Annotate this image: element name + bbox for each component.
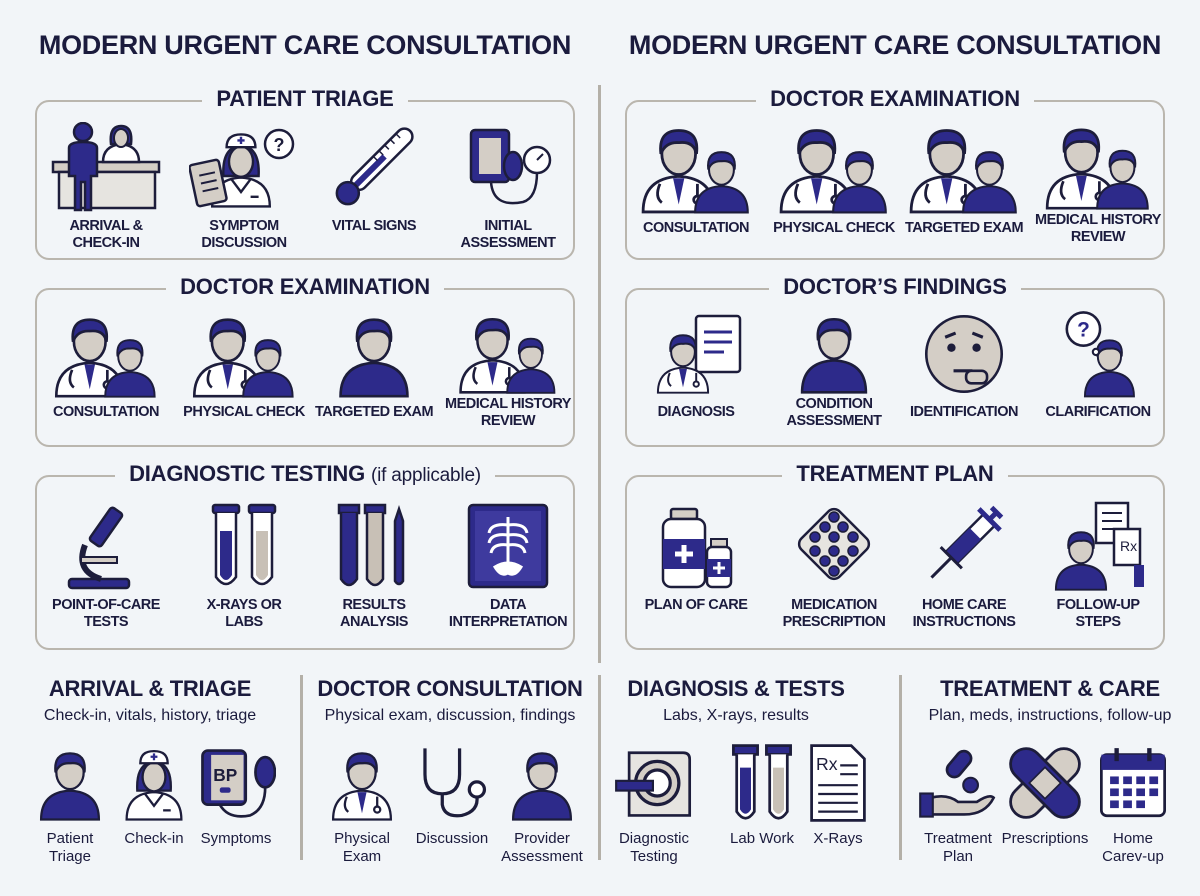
icon: symptoms [201, 749, 276, 847]
heading: patient triage: PATIENT TRIAGE [216, 86, 394, 111]
item: home care instructions [913, 506, 1016, 630]
heading: diagnosis & tests [586, 676, 886, 725]
heading: doctor consultation [317, 676, 583, 724]
icon: discussion: Discussion [416, 830, 488, 847]
heading: diagnosis & tests: DIAGNOSIS & TESTS [627, 676, 845, 701]
icon: home care / follow-up: Carev-up [1102, 848, 1164, 865]
item: data interpretation [449, 504, 567, 630]
icon: check-in: Check-in [124, 830, 184, 847]
icon: diagnostic testing [606, 742, 702, 866]
item: x-rays or labs: X-RAYS OR [207, 597, 281, 613]
item: medical history review: REVIEW [481, 413, 535, 429]
icon: home care / follow-up [1085, 742, 1181, 866]
icon: patient triage [40, 752, 100, 865]
item: arrival & check-in: ARRIVAL & [69, 218, 143, 234]
icon: x-rays: X-Rays [813, 830, 863, 847]
icon: treatment plan: Plan [943, 848, 973, 865]
item: data interpretation: DATA [490, 597, 526, 613]
panel: doctor examination (right) [625, 100, 1165, 260]
item: medical history review [1035, 128, 1162, 245]
heading: treatment plan: TREATMENT PLAN [796, 461, 994, 486]
heading: diagnostic testing: DIAGNOSTIC TESTING (if applicable) [129, 461, 481, 486]
heading: doctor consultation: Physical exam, discussion, findings [325, 707, 575, 724]
item: medical history review: MEDICAL HISTORY [1035, 212, 1161, 228]
item: consultation: CONSULTATION [643, 220, 749, 236]
icon: diagnostic testing: Diagnostic [619, 830, 689, 847]
item: initial assessment: INITIAL [484, 218, 532, 234]
icon: x-rays: Rx [816, 754, 838, 774]
item: arrival & check-in: CHECK-IN [73, 235, 139, 251]
heading: doctor examination: DOCTOR EXAMINATION [180, 274, 430, 299]
heading: doctor's findings: DOCTOR’S FINDINGS [783, 274, 1007, 299]
heading: diagnosis & tests: Labs, X-rays, results [663, 707, 809, 724]
item: x-rays or labs [206, 504, 282, 630]
icon: check-in [124, 750, 184, 847]
item: symptom discussion [189, 128, 294, 251]
section: arrival & triage [40, 676, 276, 865]
item: home care instructions: INSTRUCTIONS [913, 614, 1015, 630]
item: results analysis: RESULTS [342, 597, 406, 613]
icon: provider assessment: Provider [514, 830, 570, 847]
item: clarification [1045, 311, 1151, 420]
panel: doctor's findings [625, 288, 1165, 447]
panel: treatment plan [625, 475, 1165, 650]
item: targeted exam: TARGETED EXAM [315, 404, 433, 420]
heading: treatment & care [900, 676, 1200, 725]
item: home care instructions: HOME CARE [922, 597, 1006, 613]
item: results analysis [338, 504, 408, 630]
item: follow-up steps: STEPS [1075, 614, 1121, 630]
icon: physical exam: Physical [334, 830, 390, 847]
title: left: MODERN URGENT CARE CONSULTATION [39, 30, 571, 60]
item: point-of-care tests: TESTS [84, 614, 128, 630]
icon: provider assessment: Assessment [501, 848, 583, 865]
item: initial assessment [460, 128, 556, 251]
item: initial assessment: ASSESSMENT [461, 235, 555, 251]
item: targeted exam [315, 318, 433, 420]
icon: provider assessment [501, 752, 583, 865]
item: condition assessment: ASSESSMENT [787, 413, 881, 429]
item: symptom discussion: SYMPTOM [209, 218, 279, 234]
item: medical history review: MEDICAL HISTORY [445, 396, 571, 412]
heading: treatment & care: Plan, meds, instructions, follow-up [929, 707, 1171, 724]
item: results analysis: ANALYSIS [340, 614, 408, 630]
item: symptom discussion: DISCUSSION [201, 235, 287, 251]
icon: diagnostic testing: Testing [630, 848, 678, 865]
item: condition assessment [786, 318, 882, 429]
panel: doctor examination (left) [35, 288, 575, 447]
item: vital signs: VITAL SIGNS [332, 218, 416, 234]
icon: lab work [714, 742, 810, 848]
heading: arrival & triage [44, 676, 256, 724]
item: medication prescription: PRESCRIPTION [783, 614, 885, 630]
heading: doctor consultation: DOCTOR CONSULTATION [317, 676, 583, 701]
icon: patient triage: Patient [47, 830, 93, 847]
heading: arrival & triage: ARRIVAL & TRIAGE [49, 676, 251, 701]
item: consultation: CONSULTATION [53, 404, 159, 420]
icon: treatment plan: Treatment [924, 830, 992, 847]
icon: physical exam: Exam [343, 848, 381, 865]
icon: home care / follow-up: Home [1113, 830, 1153, 847]
section: diagnosis & tests [600, 676, 900, 866]
icon: x-rays [790, 742, 886, 848]
item: arrival & check-in [52, 122, 160, 251]
item: condition assessment: CONDITION [796, 396, 872, 412]
item: follow-up steps [1054, 502, 1144, 630]
panel: patient triage [35, 100, 575, 260]
item: identification: IDENTIFICATION [910, 404, 1018, 420]
icon: physical exam [332, 752, 392, 865]
item: clarification: ? [1077, 318, 1090, 341]
panel: diagnostic testing [35, 475, 575, 650]
item: medical history review: REVIEW [1071, 229, 1125, 245]
section: treatment & care [900, 676, 1200, 866]
item: identification [910, 315, 1018, 420]
icon: symptoms: Symptoms [201, 830, 271, 847]
item: medication prescription [783, 508, 885, 630]
item: vital signs [332, 127, 416, 234]
icon: prescriptions [997, 742, 1093, 848]
icon: treatment plan [910, 742, 1006, 866]
heading: doctor examination right: DOCTOR EXAMINATION [770, 86, 1020, 111]
item: consultation [642, 129, 749, 236]
item: point-of-care tests [52, 506, 160, 630]
icon: patient triage: Triage [49, 848, 91, 865]
item: clarification: CLARIFICATION [1045, 404, 1151, 420]
item: diagnosis: DIAGNOSIS [658, 404, 734, 420]
heading: arrival & triage: Check-in, vitals, history, triage [44, 707, 256, 724]
item: targeted exam [905, 129, 1023, 236]
item: medication prescription: MEDICATION [791, 597, 877, 613]
item: physical check [773, 129, 896, 236]
section: doctor consultation [317, 676, 583, 865]
heading: treatment & care: TREATMENT & CARE [940, 676, 1160, 701]
item: diagnosis [656, 314, 742, 420]
item: targeted exam: TARGETED EXAM [905, 220, 1023, 236]
icon: prescriptions: Prescriptions [1002, 830, 1088, 847]
item: plan of care [645, 508, 748, 613]
title: right: MODERN URGENT CARE CONSULTATION [629, 30, 1161, 60]
item: symptom discussion: ? [274, 135, 284, 155]
item: physical check [183, 318, 306, 420]
item: x-rays or labs: LABS [225, 614, 263, 630]
icon: lab work: Lab Work [730, 830, 794, 847]
item: follow-up steps: Rx [1120, 538, 1137, 554]
item: medical history review [445, 318, 572, 429]
item: point-of-care tests: POINT-OF-CARE [52, 597, 160, 613]
item: data interpretation: INTERPRETATION [449, 614, 567, 630]
item: follow-up steps: FOLLOW-UP [1056, 597, 1140, 613]
item: physical check: PHYSICAL CHECK [773, 220, 895, 236]
icon: discussion [416, 748, 488, 847]
item: plan of care: PLAN OF CARE [645, 597, 747, 613]
item: physical check: PHYSICAL CHECK [183, 404, 305, 420]
item: consultation [53, 318, 159, 420]
icon: symptoms: BP [213, 765, 237, 785]
